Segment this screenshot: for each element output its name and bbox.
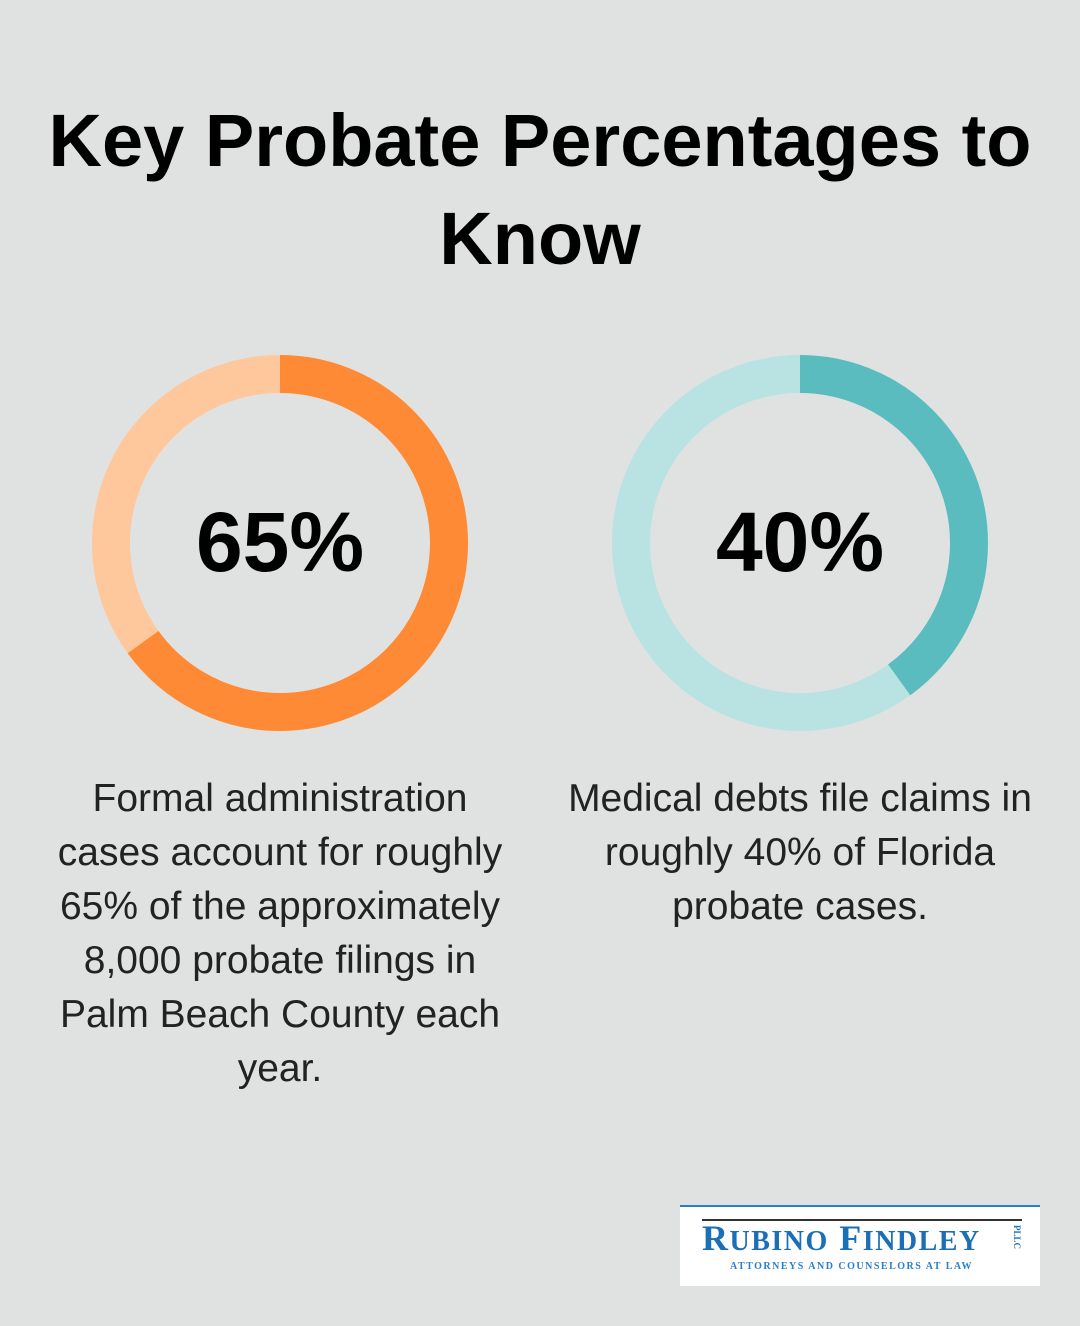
caption: formal administration: 65% of the approximately xyxy=(60,885,500,928)
caption: formal administration: Formal administration xyxy=(93,777,467,820)
caption: formal administration: Palm Beach County each xyxy=(60,993,500,1036)
title: Key Probate Percentages to xyxy=(49,99,1031,182)
chart: 40% donut: 40% xyxy=(716,495,884,589)
title xyxy=(49,99,1031,280)
caption: medical debts xyxy=(568,777,1032,928)
chart: 65% donut xyxy=(92,355,468,731)
caption: formal administration: 8,000 probate filings in xyxy=(84,939,476,982)
logo xyxy=(680,1205,1040,1286)
caption: formal administration: cases account for roughly xyxy=(58,831,502,874)
logo: ATTORNEYS AND COUNSELORS AT LAW xyxy=(730,1261,973,1272)
chart: 40% donut xyxy=(612,355,988,731)
caption: medical debts: probate cases. xyxy=(672,885,928,928)
title: Know xyxy=(439,197,641,280)
chart: 65% donut: 65% xyxy=(196,495,364,589)
caption: medical debts: roughly 40% of Florida xyxy=(605,831,995,874)
logo: PLLC xyxy=(1012,1225,1022,1249)
logo: RUBINO FINDLEY xyxy=(702,1218,981,1258)
caption: formal administration: year. xyxy=(238,1047,322,1090)
caption: medical debts: Medical debts file claims in xyxy=(568,777,1032,820)
caption: formal administration xyxy=(58,777,502,1090)
